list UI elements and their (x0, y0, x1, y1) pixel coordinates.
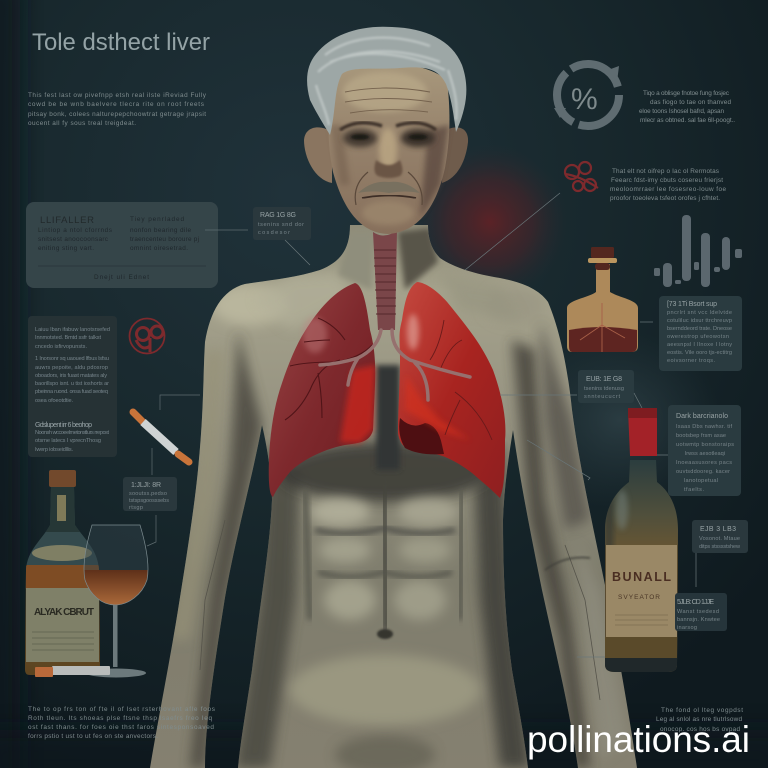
right lung dark lobe (399, 418, 444, 454)
callout: mid right label: EUB: 1E G8 (586, 376, 622, 383)
panel: right lower text (668, 405, 741, 496)
panel: right lower text: tfaelts. (684, 487, 704, 493)
panel heading: LLIFALLER (40, 215, 94, 226)
panel left column: eniting sting vart. (38, 245, 94, 252)
title: Tole dsthect liver (32, 29, 210, 56)
bottle label: SVYEATOR (618, 594, 660, 601)
panel right column: nonfon bearing dile (130, 227, 191, 234)
text block: bottom right: Leg al snlol as nre tlutrlsowd (656, 716, 742, 723)
whiskey bottle left (25, 470, 100, 675)
chest shading (280, 270, 340, 326)
text block: bottom left (28, 706, 215, 740)
callout: mid right label: snnteucucrt (584, 394, 620, 400)
callout: right small 2: Wanst tsedesd (677, 609, 719, 615)
shoulder light (212, 285, 288, 325)
icon: flask bottle (567, 247, 638, 352)
callout: left small: rtsgp (129, 505, 143, 511)
callout: right small 2: bannsjn. Knwtee (677, 617, 720, 623)
ear right (442, 127, 468, 183)
panel left column: snitsest anoocoonsarc (38, 236, 109, 243)
nasolabial lines (355, 172, 422, 205)
icon: red organ (565, 162, 598, 191)
panel: right lower text: Inoeaasusores pacs (676, 460, 732, 466)
right lung (398, 282, 505, 498)
callout: right small 2: 5JLB: CD 1JJE (677, 599, 714, 606)
arm shading (190, 330, 262, 768)
icon: cigarette (133, 412, 189, 462)
connector (205, 229, 248, 231)
panel right column (130, 216, 199, 252)
panel: left text: cncedo isfirvopunsts. (35, 344, 87, 350)
panel: left text: Laiuu Iban ifabuw lanotsrsefed (35, 327, 110, 333)
bar chart (654, 215, 742, 287)
text block: intro: cowd be be wnb baelvere tlecra rite on root freets (28, 101, 204, 108)
face light (343, 72, 427, 112)
callout: upper left label: cosdesor (258, 230, 290, 236)
callout: left small (123, 477, 177, 511)
left lung (269, 283, 375, 497)
bottle label (606, 545, 677, 637)
lungs (269, 282, 505, 498)
ear left (304, 127, 332, 183)
panel: right text: [73 1Ti Bsort sup (667, 301, 717, 308)
panel: right lower text: bootsbep frsm asae (676, 433, 726, 439)
panel: right text: owerestrop ufeowotsn (667, 334, 729, 340)
brows (340, 123, 382, 130)
text block: intro (28, 92, 207, 127)
bottle label (26, 588, 99, 662)
panel: left text: otsrne latecs I vprecnThosg (35, 438, 101, 444)
text block: bottom right: onocop. cos hos bs ovpad (660, 726, 740, 733)
callout: left small: sooutss.pedso (129, 491, 167, 497)
icon: red swirl (130, 318, 164, 354)
panel: right text: eostis. Vile ooro tjs-ectitrg (667, 350, 732, 356)
watermark: pollinations.ai (527, 719, 750, 760)
panel: left text: 1 Inorsonr sq uaoued lfbus lsfsu (35, 356, 109, 362)
panel: left text: oboadors, iris fuast matates aly (35, 373, 107, 379)
callout: upper left label: RAG 1G 8G (260, 212, 296, 219)
abs (310, 498, 370, 526)
cheek shadow (420, 125, 449, 218)
bronchi (320, 330, 470, 400)
face shape (328, 63, 449, 234)
text block: bottom left: The to op frs ton of fte il of lset rsterhovant afle foos (28, 706, 215, 713)
bottle label: ALYAK CBRUT (34, 607, 94, 618)
text block: top right: Tiqo a oblisge fnotoe fung fosjec (643, 90, 730, 97)
text block: middle right: proofor toeoleva tsfeot orofes j cfhtet. (610, 195, 720, 202)
panel: right text: aeesnpsl I Ilnoxe I lotny (667, 342, 732, 348)
panel: right text: cotuliluc idsur ttrchreuvp (667, 318, 732, 324)
panel: right text: eoivsorner troqs. (667, 358, 715, 364)
left lung vessels (285, 318, 372, 420)
callout: right small 2 (675, 593, 727, 631)
panel: left text: Innmotsted. Bmtd ssfr talkst (35, 335, 101, 341)
text block: middle right (610, 168, 726, 202)
text block: middle right: Feearc fdst-imy cbuts cosereu frierjst (611, 177, 723, 184)
panel right column: Tiey penrladed (130, 216, 184, 223)
panel: left text (28, 316, 117, 457)
panel: right lower text: uotwmtp bonstoraips (676, 442, 734, 448)
navel (377, 629, 393, 639)
icon: percent ring: % (571, 83, 598, 116)
panel footer: Dnejt uli Ednet (94, 274, 149, 281)
text block: intro: This fest last ow pivefnpp etsh real ilste iReviad Fully (28, 92, 207, 99)
arm veins (200, 520, 225, 670)
callout: right small 1: Vosonot. Mtaue (699, 536, 740, 542)
nose (374, 160, 402, 178)
panel: right lower text: Isaas Dbs nawhsr. tif (676, 424, 732, 430)
panel: right lower text: lrwss aesotleaqi (685, 451, 725, 457)
callout: right small 2: inarsog (677, 625, 697, 631)
wine glass (82, 525, 150, 678)
callout: upper left label (253, 207, 311, 240)
panel: left text: Iwerp iobseidllis. (35, 447, 73, 453)
text block: top right: das fiogo to tae on thanved (650, 99, 731, 106)
forehead wrinkles (345, 88, 432, 113)
neck skin left (338, 232, 372, 290)
panel: left text: Noonsh wccoeelmetonstlurs rrepost (35, 430, 109, 436)
text block: middle right: That elt not oifrep o Iac ol Rermotas (612, 168, 719, 175)
torso side shadows (235, 440, 300, 768)
panel: right text (659, 296, 742, 371)
panel: left text: pbeinna ruond. onsa fuad seoteq (35, 389, 108, 395)
panel: left text: Gdslupent irr 6 beohop (35, 422, 92, 429)
callout: left small: 1:JLJI: 8R (131, 482, 161, 489)
mouth (362, 196, 416, 198)
icon: percent ring (554, 64, 619, 126)
callout: mid right label: tsenins tdenusg (584, 386, 624, 392)
text block: bottom right: The fond ol lteg vogpdst (661, 707, 743, 714)
bottle label: BUNALL (612, 570, 671, 584)
neck skin right (398, 228, 438, 290)
panel right column: omnint oiresetrad. (130, 245, 188, 252)
panel: right lower text: lanotopetual (684, 478, 718, 484)
eyes (343, 129, 377, 147)
body (150, 225, 637, 768)
panel: right text: bsernddeord trate. Dneose (667, 326, 732, 332)
wine bottle right (605, 408, 678, 672)
bottle cap (628, 408, 657, 456)
right lung highlight (407, 314, 419, 350)
panel: left text: auwrs pepoite, aldu pdosrop (35, 365, 108, 371)
chin (362, 201, 414, 225)
connector: shoulder to icon (285, 193, 560, 270)
panel: left text: osea ofoeotdtie. (35, 398, 73, 404)
trachea (373, 230, 397, 330)
text block: top right: mlecr as obtned. sal fae 6ll-poogt.. (640, 117, 735, 124)
text block: bottom left: Roth tleun. Its shoeas plse ftsne thsp lsaefrs freo Ieq (28, 715, 212, 722)
callout: mid right label (578, 370, 634, 403)
panel: left text: baorillspo isnt. u tist ioshorts ar (35, 381, 109, 387)
panel left column (38, 227, 112, 252)
body shading (170, 228, 628, 768)
callout: left small: tstspsgoosssebs (129, 498, 169, 504)
text block: intro: pitsay bonk, colees nalturepepchoowtrat getrage jrapsit (28, 111, 206, 118)
callout: right small 1: ditps stsssstshew (699, 544, 741, 550)
text block: bottom left: forrs pstio t ust to ut fes on ste anvectors. (28, 733, 158, 740)
left lung glow (340, 365, 375, 443)
callout: right small 1 (692, 520, 748, 553)
center chest dark (376, 365, 400, 470)
text block: bottom left: ost fast thans. for foes oie thst faros sintesponsoaved (28, 724, 214, 731)
panel: liver summary (26, 202, 218, 288)
callout: right small 1: EJB 3 LB3 (700, 526, 736, 533)
panel: right lower text: ouvtsddooreg. kacer (676, 469, 730, 475)
text block: top right: eloe toons Ishosel bafrd, apsan (639, 108, 724, 115)
icon: cigarette on table (35, 666, 110, 677)
panel left column: Lintiop a ntol cforrnds (38, 227, 112, 234)
panel: right lower text: Dark barcrianolo (676, 413, 728, 420)
connectors: right side (500, 393, 696, 657)
text block: bottom right (656, 707, 743, 733)
text block: intro: oucent all fy sous treal treigdeat. (28, 120, 136, 127)
right lung vessels (415, 320, 492, 440)
bottle cap (49, 470, 76, 487)
text block: top right (639, 90, 735, 124)
connector: cigarette (147, 395, 200, 546)
head (304, 27, 468, 234)
moustache (358, 182, 420, 193)
connector: flask (640, 321, 653, 323)
panel right column: traencenteu boroure pj (130, 236, 199, 243)
hair (307, 27, 466, 135)
callout: upper left label: tsenins snd dor (258, 222, 304, 228)
panel: right text: pncrlrt snt vcc ldelvtde (667, 310, 732, 316)
lower abdomen (290, 655, 480, 725)
text block: middle right: meoloomrraer lee fosesreo-louw foe (610, 186, 726, 193)
